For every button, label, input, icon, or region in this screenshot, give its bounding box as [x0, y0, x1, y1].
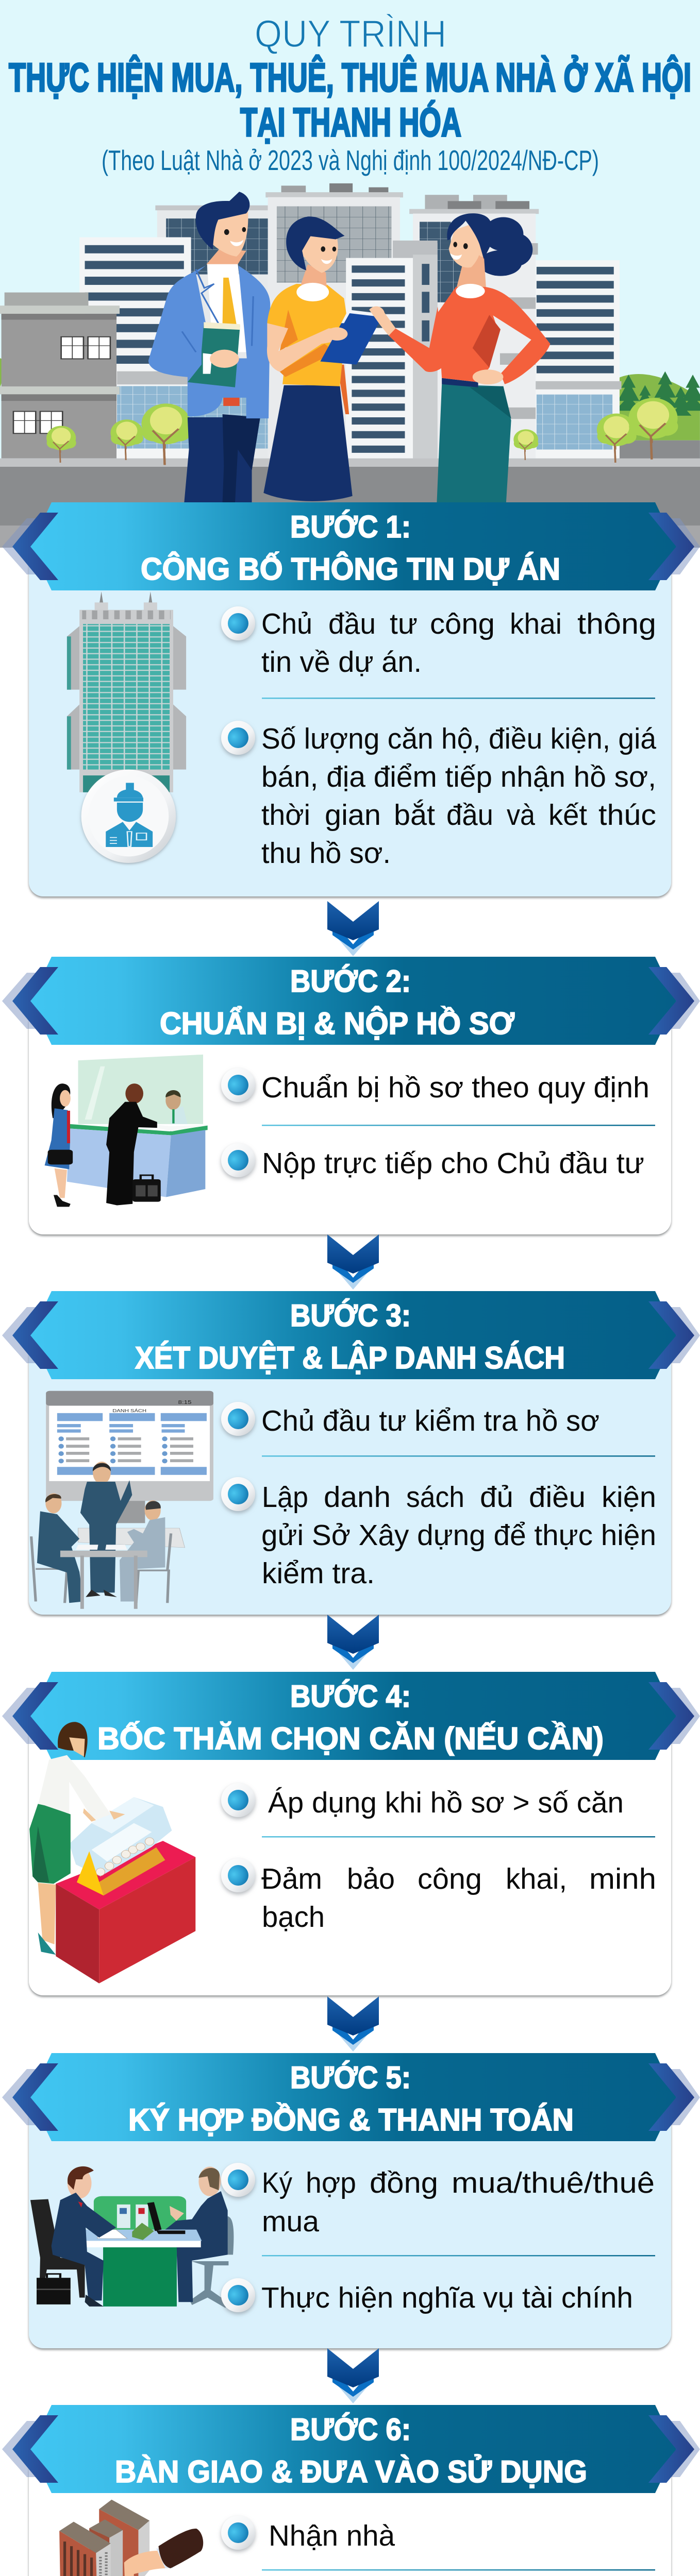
- bullet 4.2: [221, 1858, 255, 1892]
- card 1: [29, 554, 671, 896]
- illustration: list review meeting: [31, 1391, 213, 1609]
- header 1: BƯỚC 1:: [290, 510, 411, 544]
- bullet 1.2: [221, 721, 255, 755]
- text 3.2: [261, 1481, 656, 1590]
- text 4.2: [261, 1862, 656, 1934]
- text 4.2: bảo: [347, 1862, 395, 1895]
- divider: [262, 2569, 655, 2571]
- text 5.2: Thực hiện nghĩa vụ tài chính: [261, 2281, 633, 2314]
- header 5: KÝ HỢP ĐỒNG & THANH TOÁN: [128, 2103, 574, 2137]
- bullet 2.1: [221, 1068, 255, 1102]
- text 3.2: điều: [529, 1481, 586, 1514]
- hill and pines: [0, 358, 700, 459]
- header 2: CHUẨN BỊ & NỘP HỒ SƠ: [160, 1006, 515, 1041]
- text 1.2: bán, địa điểm tiếp nhận hồ sơ,: [261, 760, 656, 793]
- header 5: BƯỚC 5:: [290, 2060, 411, 2095]
- bullet 2.2: [221, 1143, 255, 1177]
- text 3.2: sách: [406, 1481, 464, 1514]
- bullet 3.2: [221, 1477, 255, 1511]
- text 1.1: thông: [577, 607, 656, 640]
- text 3.1: Chủ đầu tư kiểm tra hồ sơ: [261, 1404, 599, 1437]
- building: low grey house: [0, 293, 120, 459]
- step 4 panel: [2, 1672, 700, 1995]
- text 1.1: công: [430, 607, 495, 640]
- card 2: [29, 1008, 671, 1234]
- header 4: BƯỚC 4:: [290, 1679, 411, 1714]
- text 4.1: Áp dụng khi hồ sơ > số căn: [268, 1786, 624, 1819]
- header 5: [2, 2053, 700, 2141]
- header 2: [2, 957, 700, 1045]
- text 2.1: Chuẩn bị hồ sơ theo quy định: [261, 1071, 649, 1104]
- text 3.2: kiểm tra.: [262, 1557, 375, 1590]
- text 5.1: Ký: [262, 2166, 292, 2199]
- card 5: [29, 2105, 671, 2348]
- divider: [262, 698, 655, 699]
- building: back left: [79, 206, 269, 459]
- arrow 1: [327, 901, 379, 956]
- header 6: BƯỚC 6:: [290, 2412, 411, 2447]
- illustration: service counter: [45, 1055, 208, 1207]
- text 1.1: đầu: [328, 607, 376, 640]
- header 4: [2, 1672, 700, 1760]
- header 3: BƯỚC 3:: [290, 1298, 411, 1333]
- title: QUY TRÌNH: QUY TRÌNH: [255, 12, 446, 55]
- text 1.2: Số lượng căn hộ, điều kiện, giá: [261, 722, 656, 755]
- text 1.2: và: [507, 799, 535, 832]
- illustration: signing contract: [30, 2166, 234, 2308]
- text 2.2: Nộp trực tiếp cho Chủ đầu tư: [262, 1147, 644, 1180]
- header 4: BỐC THĂM CHỌN CĂN (NẾU CẦN): [97, 1721, 604, 1756]
- man in blue blazer: [148, 192, 270, 502]
- illustration: handing over keys: [48, 2500, 203, 2576]
- bullet 6.1: [221, 2516, 255, 2550]
- text 3.2: đủ: [480, 1481, 513, 1514]
- text 5.1: mua/thuê/thuê: [452, 2166, 655, 2199]
- building: front striped: [346, 258, 413, 459]
- text 4.2: khai,: [506, 1862, 567, 1895]
- text 1.1: tư: [390, 607, 418, 640]
- text 1.2: kết: [548, 799, 587, 832]
- text 5.1: [262, 2166, 655, 2238]
- card 3: [29, 1343, 671, 1615]
- divider: [262, 1455, 655, 1457]
- text 1.2: [261, 722, 656, 870]
- text 1.1: [261, 607, 656, 679]
- woman in yellow top: [263, 216, 383, 501]
- header 3: XÉT DUYỆT & LẬP DANH SÁCH: [135, 1341, 565, 1375]
- hero background: [0, 0, 700, 548]
- header 1: [2, 502, 700, 590]
- text 3.2: gửi Sở Xây dựng để thực hiện: [261, 1519, 656, 1552]
- text 1.2: thúc: [598, 799, 656, 832]
- header 6: [2, 2405, 700, 2493]
- divider: [262, 1125, 655, 1126]
- building: grey slab: [393, 241, 438, 459]
- text 5.1: mua: [262, 2205, 319, 2238]
- text 1.1: tin về dự án.: [261, 646, 422, 679]
- text 4.2: Đảm: [261, 1862, 322, 1895]
- step 2 panel: [2, 957, 700, 1234]
- header 6: BÀN GIAO & ĐƯA VÀO SỬ DỤNG: [115, 2454, 587, 2489]
- arrow 2: [327, 1234, 379, 1290]
- text 1.1: khai: [510, 607, 562, 640]
- text 3.2: danh: [324, 1481, 391, 1514]
- step 6 panel: [2, 2405, 700, 2576]
- arrow 3: [327, 1615, 379, 1670]
- bullet 3.1: [221, 1402, 255, 1436]
- text 1.1: Chủ: [261, 607, 312, 640]
- header 1: CÔNG BỐ THÔNG TIN DỰ ÁN: [141, 552, 560, 586]
- bullet 5.2: [221, 2278, 255, 2312]
- title: main heading: [9, 55, 691, 145]
- text 1.2: bắt: [394, 799, 435, 832]
- illustration: tower and engineer: [67, 591, 186, 863]
- step 1 panel: [2, 502, 700, 896]
- illustration: list review meeting: DANH SÁCH: [112, 1408, 146, 1413]
- illustration: list review meeting: 8:15: [178, 1399, 192, 1405]
- building: back right: [409, 195, 539, 459]
- illustration: lottery drum: [29, 1722, 195, 1984]
- text 5.1: hợp: [306, 2166, 356, 2199]
- building: centre tower: [265, 183, 403, 459]
- header 2: BƯỚC 2:: [290, 964, 411, 998]
- card 4: [29, 1723, 671, 1995]
- text 1.2: đầu: [446, 799, 493, 832]
- step 5 panel: [2, 2053, 700, 2348]
- title: main heading: TẠI THANH HÓA: [240, 99, 461, 145]
- sidewalk: [0, 459, 700, 467]
- text 4.2: công: [418, 1862, 482, 1895]
- text 3.2: kiện: [602, 1481, 656, 1514]
- woman in red sweater: [369, 213, 550, 503]
- bullet 5.1: [221, 2163, 255, 2197]
- text 3.2: Lập: [262, 1481, 308, 1514]
- bullet 1.1: [221, 606, 255, 640]
- trees: [46, 398, 678, 465]
- text 4.2: bạch: [262, 1901, 325, 1934]
- divider: [262, 1836, 655, 1837]
- text 6.1: Nhận nhà: [269, 2519, 395, 2552]
- arrow 5: [327, 2348, 379, 2403]
- text 4.2: minh: [589, 1862, 656, 1895]
- text 5.1: đồng: [370, 2166, 438, 2199]
- step 3 panel: [2, 1291, 700, 1615]
- divider: [262, 2255, 655, 2257]
- text 1.2: thời: [261, 799, 310, 832]
- illustration: city backdrop: [0, 183, 700, 467]
- illustration: three people: [148, 192, 550, 503]
- icon: engineer in circle: [81, 770, 176, 863]
- building: right striped: [536, 260, 621, 459]
- header 3: [2, 1291, 700, 1379]
- bullet 4.1: [221, 1783, 255, 1817]
- arrow 4: [327, 1996, 379, 2052]
- text 1.2: gian: [325, 799, 381, 832]
- text 1.2: thu hồ sơ.: [261, 837, 391, 870]
- card 6: [29, 2456, 671, 2576]
